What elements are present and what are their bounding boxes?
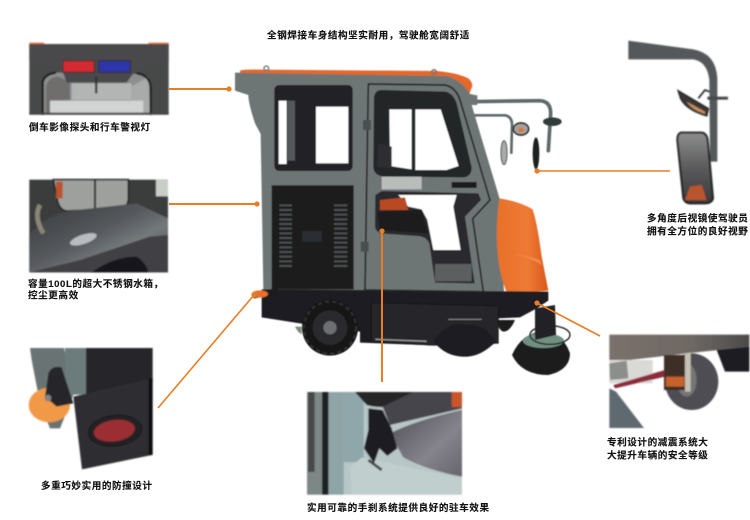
side brush bbox=[512, 305, 570, 375]
photo: cab rear view bbox=[29, 43, 169, 115]
caption: water tank: 容量100L的超大不锈钢水箱， bbox=[28, 278, 164, 290]
rear wheel bbox=[295, 300, 358, 356]
rear window bbox=[274, 85, 353, 171]
connector: hand brake bbox=[379, 228, 385, 382]
orange roof bbox=[240, 69, 472, 94]
black chassis bbox=[262, 289, 548, 345]
grey body bbox=[235, 73, 504, 293]
caption: anti-collision: 多重巧妙实用的防撞设计 bbox=[41, 480, 153, 492]
photo: bumper roller and tail light bbox=[29, 348, 153, 469]
caption: suspension line 1: 专利设计的减震系统大 bbox=[607, 436, 708, 448]
orange front cover bbox=[497, 198, 548, 294]
photo: mirror arm and mirrors bbox=[628, 41, 728, 203]
panel: rear-view mirrors bbox=[628, 41, 748, 237]
side mirrors bbox=[501, 117, 562, 169]
main product: sweeper machine bbox=[235, 66, 570, 375]
caption: mirrors line 2: 拥有全方位的良好视野 bbox=[647, 226, 748, 238]
cab lower window and seat bbox=[375, 191, 481, 283]
panel: suspension bbox=[607, 335, 749, 462]
connector: camera light bbox=[169, 86, 232, 92]
roof lifting rings bbox=[264, 66, 436, 74]
connector: suspension bbox=[534, 300, 600, 336]
caption: dust control: 控尘更高效 bbox=[28, 290, 79, 302]
door label sticker bbox=[382, 177, 422, 189]
dash slot bbox=[452, 182, 477, 188]
hinges bbox=[361, 120, 371, 252]
mirror arms bbox=[468, 101, 551, 153]
panel: water tank bbox=[28, 180, 168, 302]
cab door window bbox=[373, 90, 472, 177]
photo: stainless steel tank bbox=[29, 180, 168, 272]
caption: mirrors line 1: 多角度后视镜使驾驶员 bbox=[647, 212, 748, 224]
caption: hand brake: 实用可靠的手刹系统提供良好的驻车效果 bbox=[307, 502, 490, 514]
connector: mirrors bbox=[534, 168, 670, 174]
photo: seat and hand brake bbox=[307, 392, 462, 495]
door outline bbox=[365, 84, 490, 292]
panel: anti-collision design bbox=[29, 348, 153, 492]
photo: suspension and wheel bbox=[609, 335, 749, 428]
front wheel guard bbox=[433, 324, 496, 357]
caption: suspension line 2: 大提升车辆的安全等级 bbox=[607, 450, 708, 462]
rear service panel with vents bbox=[272, 185, 354, 289]
rear bumper roller bbox=[253, 288, 278, 298]
second wheel bbox=[497, 320, 515, 332]
panel: hand brake bbox=[307, 392, 490, 514]
connector: water tank bbox=[169, 201, 260, 207]
title text: 全钢焊接车身结构坚实耐用，驾驶舱宽阔舒适 bbox=[267, 30, 470, 42]
panel: rear camera and warning light bbox=[29, 43, 169, 134]
connector: anti-collision bbox=[158, 292, 257, 408]
caption: rear camera: 倒车影像探头和行车警视灯 bbox=[29, 122, 151, 134]
